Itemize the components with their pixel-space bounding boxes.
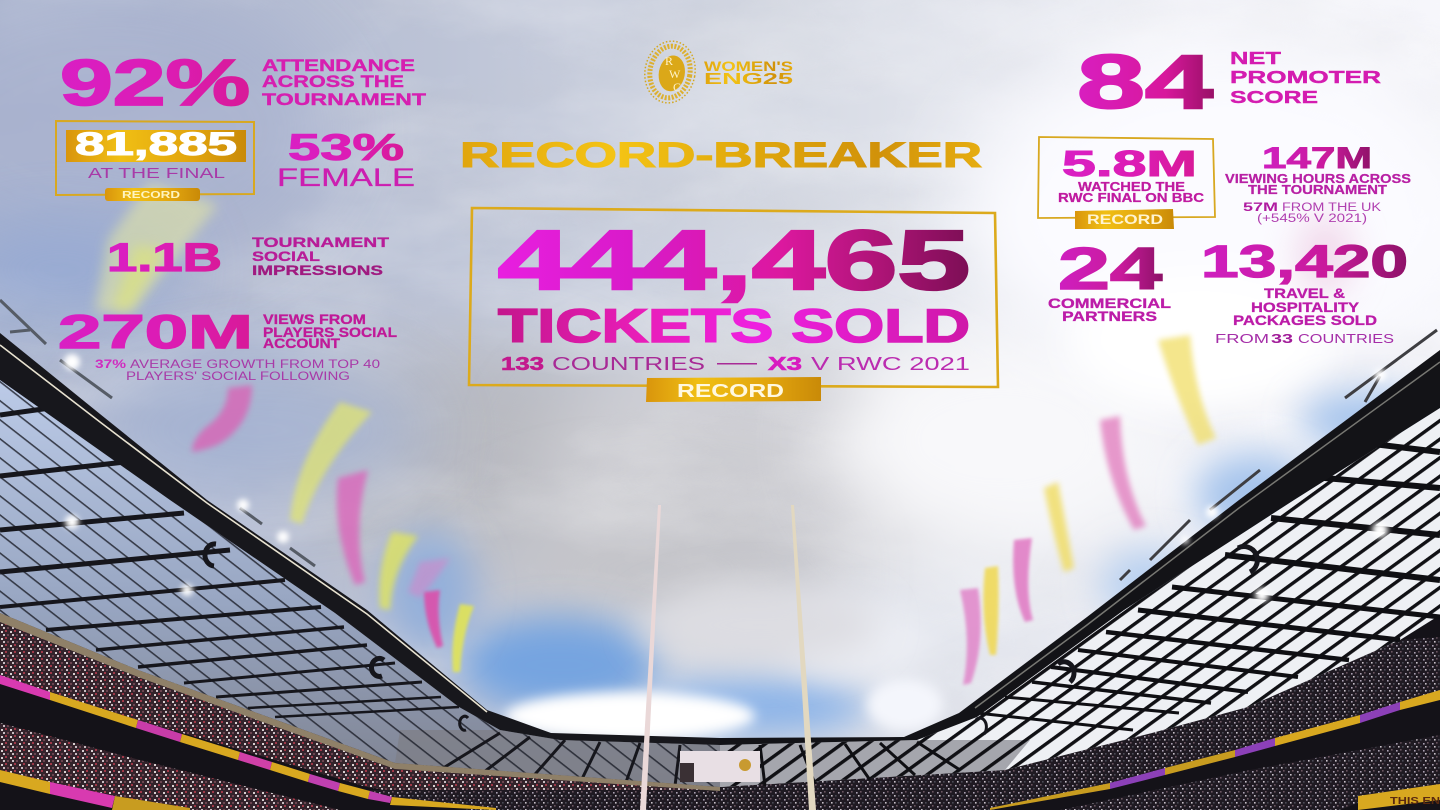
logo wordmark	[704, 58, 794, 88]
countries and growth line: 133	[501, 354, 544, 374]
stadium roof: left side	[0, 378, 720, 791]
stat: 81,885 at the final: 81,885	[75, 126, 237, 162]
stat: 24 commercial partners	[1048, 236, 1172, 324]
stat: 53% female: FEMALE	[277, 164, 415, 192]
stat: 270M player views: VIEWS FROM	[263, 311, 366, 327]
countries and growth line: X3	[768, 354, 802, 374]
stat: 92% attendance: 92%	[60, 46, 250, 119]
stadium crowd and lower tiers	[0, 605, 1440, 810]
stadium roof: right side	[720, 408, 1440, 787]
logo wordmark: ENG25	[704, 71, 794, 88]
stat: 270M player views	[58, 305, 397, 383]
stat: 92% attendance: ATTENDANCE	[262, 56, 415, 75]
stat: 147M viewing hours: 147M	[1262, 142, 1372, 175]
record badge: RECORD	[122, 189, 181, 201]
logo letters	[665, 54, 681, 94]
stat: 270M player views: 270M	[58, 305, 253, 358]
stat: 84 net promoter score: PROMOTER	[1230, 67, 1382, 87]
growth note: AVERAGE GROWTH FROM TOP 40	[130, 357, 380, 371]
logo: women's RWC ENG25	[640, 37, 794, 107]
UK viewing note	[1243, 202, 1381, 225]
stat: 1.1B social impressions: SOCIAL	[252, 248, 321, 264]
stat: 13,420 travel and hospitality: TRAVEL &	[1264, 285, 1345, 301]
stat: 24 commercial partners: COMMERCIAL	[1048, 295, 1172, 311]
stadium advertising banners	[0, 675, 1440, 810]
panel frame	[469, 208, 998, 387]
countries and growth line: COUNTRIES	[552, 354, 705, 374]
roof front edge bands	[0, 300, 1440, 745]
stat: 24 commercial partners: PARTNERS	[1062, 308, 1157, 324]
record badge: RECORD	[677, 381, 784, 401]
record badge	[1075, 209, 1174, 229]
stat: 1.1B social impressions: IMPRESSIONS	[252, 262, 383, 278]
main figure: 444,465	[498, 213, 970, 307]
logo mark	[640, 37, 700, 107]
big screen	[680, 751, 760, 782]
stat: 84 net promoter score: SCORE	[1230, 87, 1318, 107]
stat: 147M viewing hours	[1225, 142, 1411, 225]
stat: 92% attendance: TOURNAMENT	[262, 90, 427, 109]
stat: 84 net promoter score	[1077, 40, 1382, 125]
stadium advertising banners: THIS EN	[1390, 796, 1440, 807]
growth note: 37%	[95, 357, 126, 371]
stat: 53% female	[277, 127, 415, 192]
stat: 13,420 travel and hospitality: PACKAGES SOLD	[1233, 312, 1377, 328]
countries note: 33	[1271, 331, 1293, 346]
UK viewing note: (+545% V 2021)	[1257, 213, 1367, 225]
panel: tickets sold	[469, 208, 998, 402]
record badge: RECORD	[1087, 212, 1163, 227]
stat: 81,885 at the final	[56, 121, 254, 201]
title: record-breaker: RECORD-BREAKER	[460, 136, 982, 175]
countries note: FROM	[1215, 331, 1269, 346]
goal posts	[640, 505, 816, 810]
logo wordmark: WOMEN'S	[704, 58, 793, 74]
growth note: PLAYERS' SOCIAL FOLLOWING	[126, 369, 350, 383]
coloured smoke trails	[95, 182, 1353, 685]
roof edge and wall: left	[0, 613, 720, 791]
countries and growth line	[501, 354, 970, 374]
logo letters: R	[665, 54, 673, 68]
stat: 13,420 travel and hospitality	[1201, 236, 1408, 346]
stadium lights and speakers	[64, 354, 1388, 734]
record badge	[646, 377, 821, 402]
stat: 1.1B social impressions: TOURNAMENT	[252, 234, 390, 250]
stat: 270M player views: ACCOUNT	[263, 335, 340, 351]
stat: 81,885 at the final: AT THE FINAL	[88, 165, 225, 182]
stat: 5.8M watched the final: WATCHED THE	[1078, 180, 1185, 194]
tickets sold label: TICKETS SOLD	[498, 299, 970, 352]
stat: 84 net promoter score: 84	[1077, 40, 1213, 125]
countries note	[1215, 331, 1394, 346]
stat: 5.8M watched the final: 5.8M	[1062, 143, 1197, 184]
countries and growth line: V RWC 2021	[811, 354, 970, 374]
stat: 24 commercial partners: 24	[1058, 236, 1162, 302]
stat: 5.8M watched the final	[1038, 137, 1215, 229]
stat: 84 net promoter score: NET	[1230, 48, 1281, 68]
stat: 53% female: 53%	[288, 127, 404, 168]
stat: 147M viewing hours: THE TOURNAMENT	[1248, 183, 1387, 197]
logo letters: W	[669, 67, 681, 81]
countries note: COUNTRIES	[1298, 331, 1394, 346]
stat: 270M player views: PLAYERS SOCIAL	[263, 324, 397, 340]
UK viewing note: FROM THE UK	[1282, 202, 1381, 214]
record badge	[105, 188, 200, 201]
stat: 13,420 travel and hospitality: HOSPITALITY	[1251, 299, 1360, 315]
stat: 1.1B social impressions: 1.1B	[107, 236, 222, 280]
stat: 5.8M watched the final: RWC FINAL ON BBC	[1058, 191, 1204, 205]
stat: 1.1B social impressions	[107, 234, 390, 280]
stat: 13,420 travel and hospitality: 13,420	[1201, 236, 1408, 287]
stat: 92% attendance	[60, 46, 427, 119]
stat: 92% attendance: ACROSS THE	[262, 72, 404, 91]
stat: 147M viewing hours: VIEWING HOURS ACROSS	[1225, 172, 1411, 186]
gold number plate	[66, 130, 246, 162]
logo letters: C	[673, 80, 681, 94]
growth note	[95, 357, 380, 383]
UK viewing note: 57M	[1243, 202, 1278, 214]
